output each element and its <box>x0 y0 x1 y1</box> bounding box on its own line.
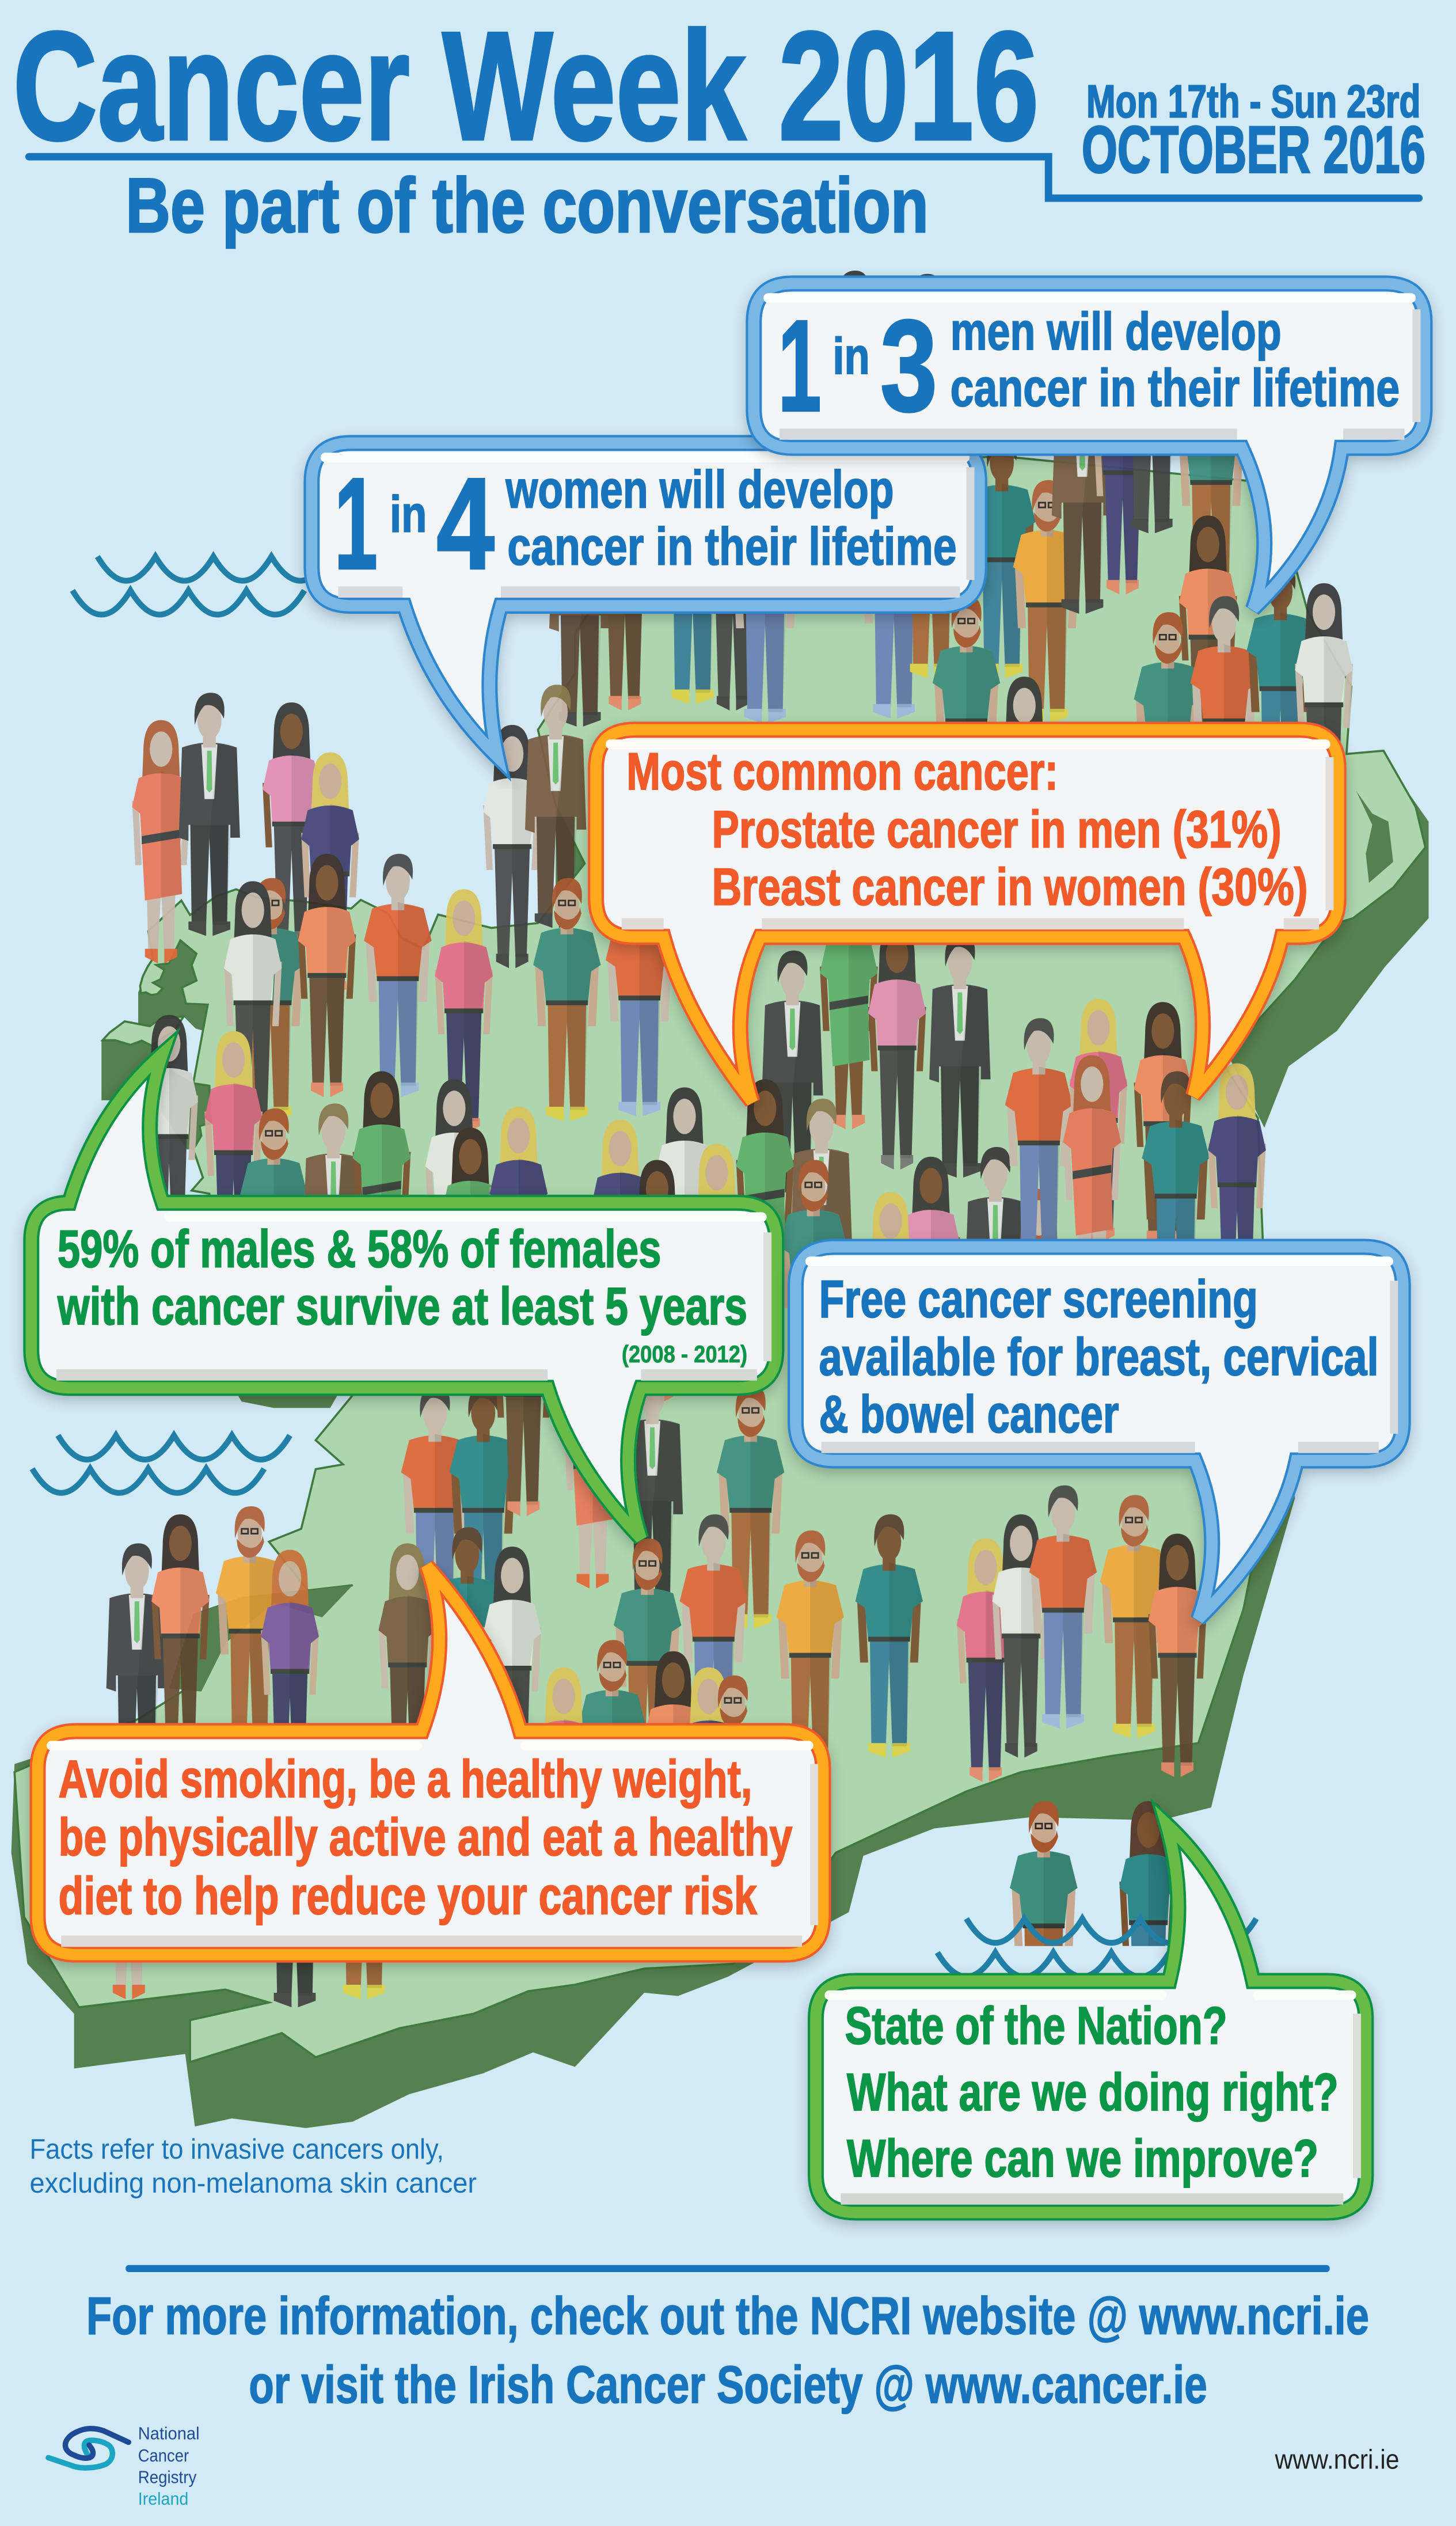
cancer type text <box>626 743 1308 916</box>
questions text <box>845 1995 1339 2188</box>
more information text <box>86 2285 1369 2414</box>
screening text <box>819 1269 1379 1444</box>
map top surface <box>14 456 1425 2062</box>
website address: www.ncri.ie <box>1275 2445 1400 2475</box>
1 in 4 numerals: 4 <box>436 451 495 597</box>
callout: reduce risk <box>37 1566 823 1955</box>
map side walls <box>12 754 1428 2128</box>
survival text: (2008 - 2012) <box>622 1340 747 1368</box>
footnote: excluding non-melanoma skin cancer <box>29 2168 477 2199</box>
men statistic text <box>951 301 1400 417</box>
callout: state of the nation <box>816 1824 1366 2213</box>
1 in 4 numerals: 1 <box>334 451 378 597</box>
women statistic text: cancer in their lifetime <box>507 516 957 576</box>
callout: screening <box>796 1247 1403 1619</box>
subtitle: Be part of the conversation <box>126 162 929 249</box>
women statistic text: women will develop <box>505 459 894 519</box>
waves: north west <box>73 557 329 614</box>
footnote <box>29 2134 477 2199</box>
callout: survival <box>31 1054 776 1539</box>
waves: south <box>937 1919 1256 1977</box>
people: central group <box>736 886 1266 1435</box>
risk reduction text: diet to help reduce your cancer risk <box>59 1866 757 1925</box>
1 in 3 numerals: in <box>832 327 870 385</box>
men statistic text: men will develop <box>951 301 1282 361</box>
more information text: or visit the Irish Cancer Society @ www.cancer.ie <box>249 2354 1207 2414</box>
risk reduction text <box>59 1749 792 1925</box>
cancer type text: Prostate cancer in men (31%) <box>712 801 1282 859</box>
map inlets <box>169 791 1393 1692</box>
screening text: Free cancer screening <box>819 1269 1258 1329</box>
people: south group <box>100 1273 1206 2007</box>
logo wordmark <box>138 2423 200 2509</box>
header rule <box>29 157 1419 198</box>
women statistic text <box>505 459 957 576</box>
survival text: with cancer survive at least 5 years <box>57 1276 747 1336</box>
icon: eye swirl <box>48 2429 128 2468</box>
survival text: 59% of males & 58% of females <box>58 1218 661 1278</box>
callout: most common cancer <box>596 730 1339 1102</box>
1 in 3 numerals: 1 <box>778 293 822 439</box>
people: north west group <box>132 685 746 1403</box>
1 in 4 numerals: in <box>390 485 427 542</box>
risk reduction text: Avoid smoking, be a healthy weight, <box>59 1749 752 1809</box>
footer rule <box>126 2265 1330 2272</box>
people: north group <box>549 271 1353 920</box>
waves: west <box>32 1435 290 1493</box>
date range <box>1082 75 1425 187</box>
questions text: State of the Nation? <box>845 1995 1227 2055</box>
callout: 1 in 4 women <box>311 443 979 757</box>
people: standing in the sea <box>1010 1801 1170 1946</box>
map: Mayo coast strip <box>102 1016 184 1046</box>
screening text: & bowel cancer <box>819 1384 1119 1444</box>
1 in 4 numerals <box>334 451 495 597</box>
title: Cancer Week 2016 <box>13 0 1039 172</box>
1 in 3 numerals <box>778 293 937 439</box>
map of Ireland <box>12 456 1428 2128</box>
logo wordmark: Cancer <box>138 2445 189 2466</box>
logo wordmark: National <box>138 2423 200 2443</box>
1 in 3 numerals: 3 <box>880 293 937 439</box>
risk reduction text: be physically active and eat a healthy <box>59 1807 792 1867</box>
logo: National Cancer Registry Ireland <box>48 2423 200 2509</box>
questions text: Where can we improve? <box>847 2128 1318 2188</box>
callout: 1 in 3 men <box>754 283 1424 609</box>
logo wordmark: Registry <box>138 2467 197 2487</box>
cancer type text: Most common cancer: <box>626 743 1058 801</box>
survival text <box>57 1218 747 1368</box>
cancer type text: Breast cancer in women (30%) <box>712 858 1308 916</box>
logo wordmark: Ireland <box>138 2489 188 2509</box>
footnote: Facts refer to invasive cancers only, <box>29 2134 444 2165</box>
